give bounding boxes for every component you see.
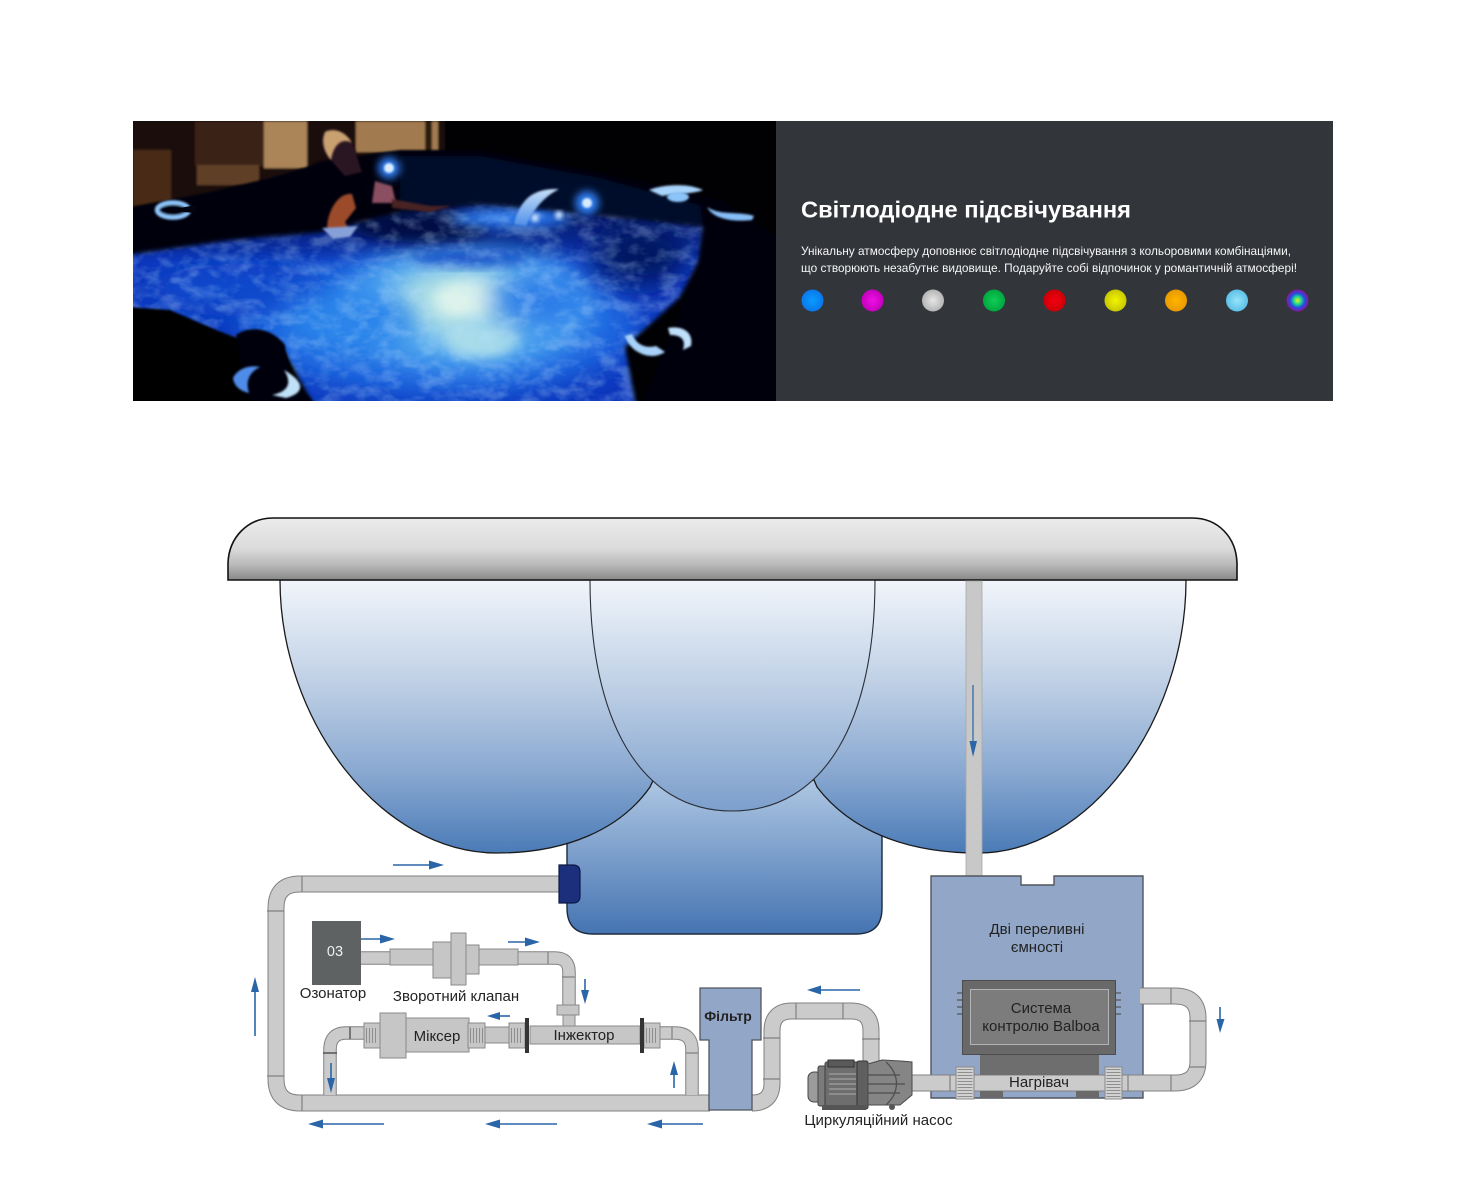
body text: Унікальну атмосферу доповнює світлодіодне підсвічування з кольоровими комбінаціями, (801, 244, 1291, 258)
pump label: Циркуляційний насос (804, 1112, 953, 1129)
arrow: pump outlet (807, 986, 860, 994)
mixer and injector line (323, 1013, 698, 1095)
main return pipe (267, 876, 710, 1111)
ozonator label: Озонатор (300, 985, 366, 1002)
arrow: bottom right (647, 1120, 703, 1128)
overflow tanks (931, 876, 1143, 1098)
arrow: bottom centre (485, 1120, 557, 1128)
water (133, 201, 706, 401)
filter label: Фільтр (704, 1008, 752, 1024)
circulation pump (808, 1060, 912, 1110)
colour swatches (802, 290, 1308, 312)
heater label: Нагрівач (1009, 1074, 1069, 1091)
panel: hot tub photo (120, 121, 790, 415)
lower tank (567, 780, 882, 934)
arrow: right loop (1216, 1007, 1224, 1033)
arrow: injector inlet (670, 1061, 678, 1088)
underwater lights and fixtures (125, 157, 754, 410)
bather (313, 130, 452, 239)
arrow: overflow pipe (970, 685, 977, 757)
right loop pipe and heater (912, 988, 1206, 1091)
diagram: spa plumbing (228, 518, 1237, 1129)
control system: Система (1011, 1000, 1072, 1017)
overflow drain pipe (966, 581, 982, 876)
arrow: riser left (251, 977, 259, 1036)
body text: що створюють незабутнє видовище. Подаруйте собі відпочинок у романтичній атмосфері! (801, 261, 1297, 275)
filter (700, 988, 761, 1110)
tanks label: ємності (1011, 939, 1063, 956)
tanks label (990, 921, 1084, 956)
flow arrows (251, 685, 1224, 1128)
ozonator: 03 (327, 944, 343, 960)
right seat bowl (780, 580, 1186, 853)
control system: контролю Balboa (982, 1018, 1100, 1035)
tanks label: Дві переливні (990, 921, 1084, 938)
filter to pump pipe (752, 1003, 880, 1103)
arrow: ozone (361, 934, 395, 944)
arrow: inlet (393, 860, 444, 870)
heading: Світлодіодне підсвічування (801, 196, 1131, 222)
tub shell (125, 150, 790, 410)
arrow: after valve (508, 938, 540, 946)
centre seat bowl (590, 580, 875, 811)
heater pipe couplings (956, 1067, 1122, 1099)
ozonator (312, 921, 361, 985)
injector label: Інжектор (554, 1027, 614, 1044)
spa rim (228, 518, 1237, 580)
body text (801, 244, 1297, 275)
panel: description (776, 121, 1333, 401)
arrow: mixer flow (487, 1012, 510, 1020)
arrow: bottom left (308, 1120, 384, 1128)
check valve label: Зворотний клапан (393, 988, 519, 1005)
mixer label: Міксер (414, 1028, 460, 1045)
room background (125, 121, 445, 211)
left seat bowl (280, 580, 690, 853)
water inlet fitting (559, 865, 580, 903)
arrow: to injector (581, 979, 589, 1004)
control system (957, 980, 1121, 1098)
arrow: mixer outlet (327, 1063, 335, 1093)
ozone line with check valve (361, 933, 579, 1026)
